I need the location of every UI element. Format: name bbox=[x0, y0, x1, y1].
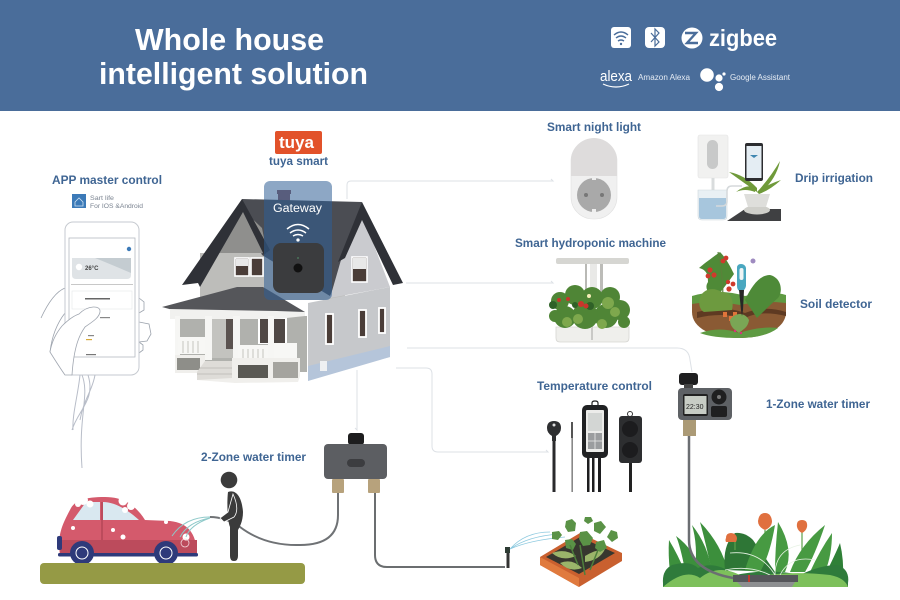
hose to garden bbox=[689, 436, 733, 578]
chimney bbox=[277, 190, 291, 210]
title: Whole house bbox=[135, 22, 324, 57]
google assistant logo: Google Assistant bbox=[730, 73, 791, 82]
right gable rake bbox=[338, 202, 403, 285]
soil detector bbox=[692, 252, 786, 338]
phone in hand: 26°C bbox=[85, 266, 99, 272]
hose bbox=[210, 493, 338, 545]
connector lines bbox=[347, 179, 692, 452]
car bbox=[57, 495, 198, 565]
phone screen bbox=[69, 238, 135, 357]
ground bbox=[40, 563, 305, 584]
1-zone water timer: 22:30 bbox=[686, 404, 704, 411]
main roof bbox=[242, 199, 362, 296]
sprinkler bbox=[505, 532, 565, 568]
gateway panel bbox=[264, 181, 332, 300]
upper windows bbox=[235, 257, 367, 282]
tuya logo bbox=[269, 131, 328, 168]
wrist bbox=[72, 375, 95, 468]
label: smart night light: Smart night light bbox=[547, 120, 641, 134]
title bbox=[99, 22, 368, 91]
water spray bbox=[172, 517, 210, 537]
flower garden bbox=[663, 513, 848, 587]
label: soil detector: Soil detector bbox=[800, 297, 872, 311]
smart night light bbox=[571, 138, 617, 219]
sensor bbox=[737, 264, 746, 291]
tomato plant bbox=[699, 252, 734, 298]
phone body bbox=[65, 222, 139, 375]
label: 2-zone water timer: 2-Zone water timer bbox=[201, 450, 306, 464]
railing bbox=[178, 337, 297, 360]
icon: wifi bbox=[287, 224, 309, 241]
phone in hand bbox=[41, 222, 151, 468]
tuya smart label: tuya smart bbox=[269, 154, 328, 168]
gateway label: Gateway bbox=[273, 203, 322, 215]
left gable rake bbox=[182, 199, 270, 287]
person bbox=[220, 472, 243, 561]
label: drip irrigation: Drip irrigation bbox=[795, 171, 873, 185]
raised garden bed bbox=[540, 517, 622, 587]
alexa logo: alexa bbox=[600, 68, 633, 85]
hand back bbox=[41, 288, 151, 353]
side wall bbox=[308, 287, 390, 377]
drip irrigation bbox=[698, 135, 781, 221]
1-zone water timer bbox=[678, 373, 732, 436]
icon: bluetooth bbox=[645, 27, 665, 48]
base bbox=[175, 355, 300, 383]
icon: wifi bbox=[611, 27, 631, 48]
sprinkler bar bbox=[733, 575, 798, 587]
right gable siding bbox=[330, 218, 390, 298]
thumb bbox=[50, 307, 100, 375]
gateway device bbox=[273, 243, 324, 293]
alexa logo bbox=[600, 68, 691, 87]
tuya logo: tuya bbox=[279, 133, 315, 152]
app label: APP master control bbox=[52, 173, 162, 187]
house bbox=[162, 190, 403, 383]
foundation bbox=[308, 346, 390, 381]
plug bbox=[547, 421, 561, 492]
zigbee logo bbox=[682, 25, 777, 51]
front steps bbox=[197, 361, 232, 380]
2-zone water timer bbox=[324, 433, 387, 493]
smart life app bbox=[72, 194, 143, 210]
porch roof bbox=[162, 287, 305, 312]
label: hydroponic: Smart hydroponic machine bbox=[515, 236, 666, 250]
front gable shingles bbox=[217, 210, 267, 253]
smart life app: Sart life bbox=[90, 195, 114, 202]
porch posts bbox=[175, 316, 274, 366]
controller bbox=[582, 401, 608, 492]
smart hydroponic machine bbox=[549, 258, 630, 342]
zigbee logo: zigbee bbox=[709, 25, 777, 51]
alexa logo: Amazon Alexa bbox=[638, 73, 691, 82]
temperature control bbox=[547, 401, 642, 492]
smart life app: For IOS &Android bbox=[90, 203, 143, 210]
wall behind roof bbox=[200, 253, 345, 300]
hose to sprinkler bbox=[375, 493, 505, 567]
label: temperature control: Temperature control bbox=[537, 379, 652, 393]
socket strip bbox=[619, 412, 642, 492]
title: intelligent solution bbox=[99, 56, 368, 91]
google assistant logo bbox=[700, 68, 791, 91]
side windows bbox=[326, 308, 385, 344]
probe bbox=[571, 422, 573, 492]
label: 1-zone water timer: 1-Zone water timer bbox=[766, 397, 870, 411]
header banner bbox=[0, 0, 900, 111]
porch wall bbox=[180, 316, 307, 372]
